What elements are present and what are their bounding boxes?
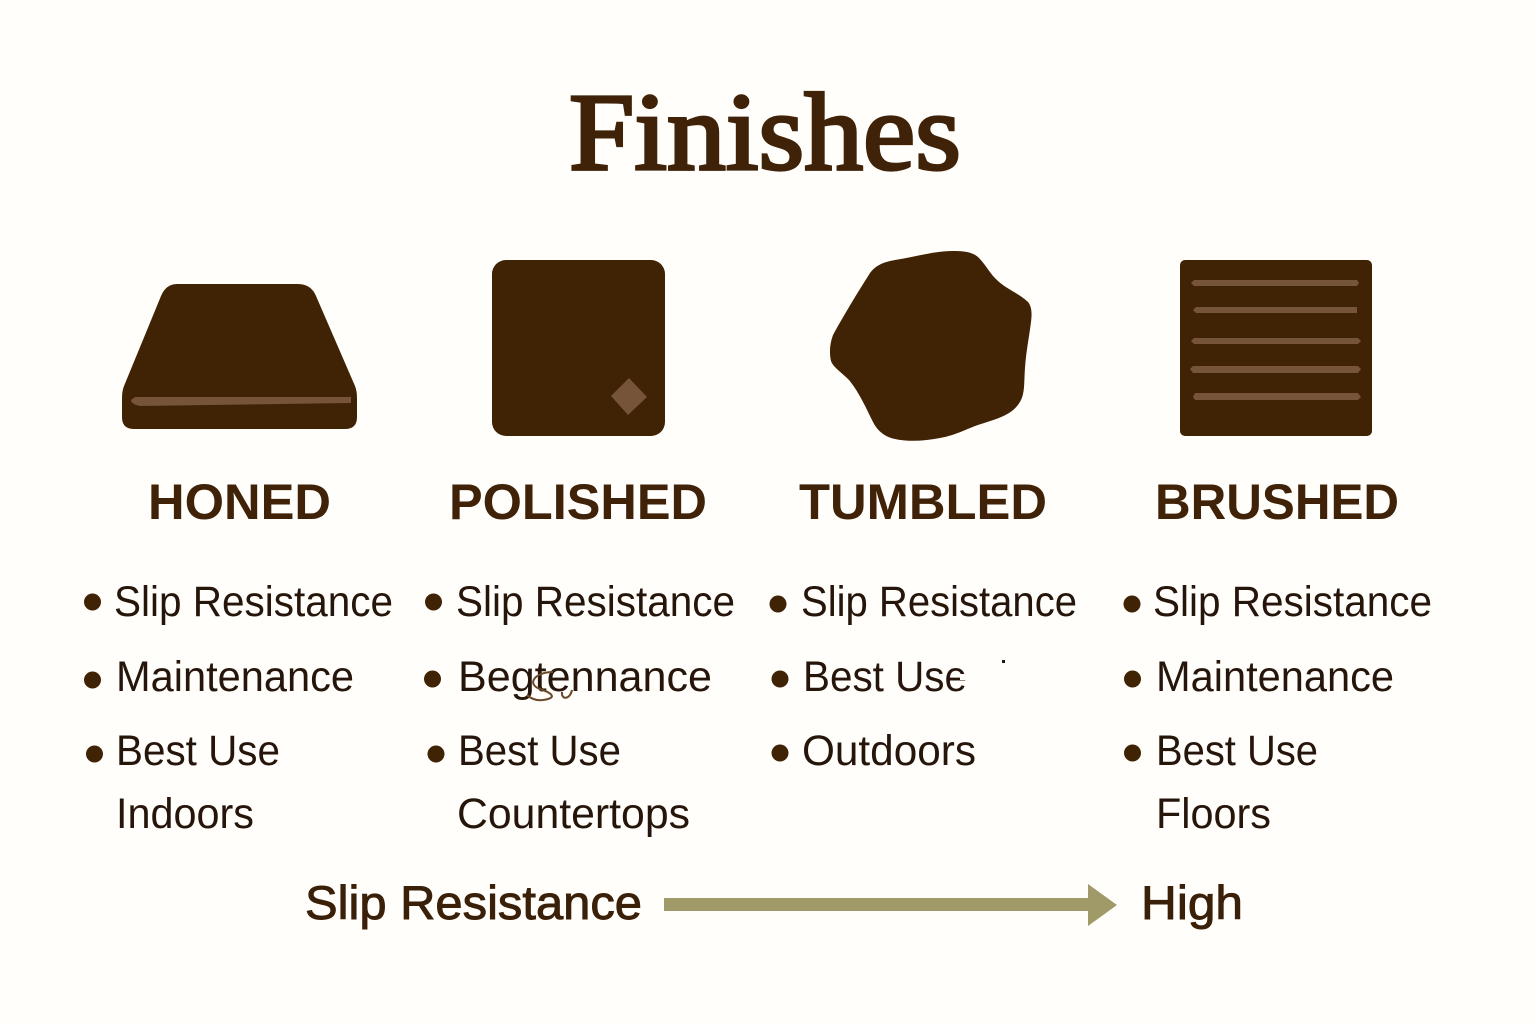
title: Finishes — [569, 71, 961, 193]
slip resistance scale — [305, 876, 1243, 929]
icon: honed stone slab — [122, 284, 357, 429]
panel: honed — [84, 284, 393, 838]
list: honed properties: Maintenance — [116, 653, 354, 701]
list: tumbled properties: Outdoors — [802, 727, 976, 775]
list: polished properties: Countertops — [457, 790, 690, 838]
heading: tumbled: TUMBLED — [799, 474, 1047, 530]
heading: brushed: BRUSHED — [1155, 474, 1399, 530]
icon: tumbled stone — [830, 251, 1032, 441]
icon: polished stone tile — [492, 260, 665, 436]
list: brushed properties: Floors — [1156, 790, 1271, 838]
arrow: increasing slip resistance — [664, 884, 1117, 926]
scale label: slip resistance: Slip Resistance — [305, 876, 642, 929]
list: honed properties: Indoors — [116, 790, 254, 838]
heading: honed: HONED — [148, 474, 331, 530]
list: tumbled properties — [770, 578, 1077, 775]
list: honed properties: Best Use — [116, 727, 280, 775]
panel: polished — [424, 260, 735, 838]
list: honed properties: Slip Resistance — [114, 578, 393, 626]
panel: brushed — [1124, 260, 1432, 838]
list: polished properties: Begtennance — [458, 653, 712, 701]
scale label: high: High — [1141, 876, 1243, 929]
list: polished properties: Best Use — [458, 727, 621, 775]
list: brushed properties: Maintenance — [1156, 653, 1394, 701]
panel: tumbled — [770, 251, 1077, 775]
list: brushed properties: Best Use — [1156, 727, 1318, 775]
list: brushed properties: Slip Resistance — [1153, 578, 1432, 626]
list: tumbled properties: Slip Resistance — [801, 578, 1077, 626]
list: brushed properties — [1124, 578, 1432, 838]
list: tumbled properties: Best Use — [803, 653, 967, 701]
list: polished properties: Slip Resistance — [456, 578, 735, 626]
list: honed properties — [84, 578, 393, 838]
heading: polished: POLISHED — [449, 474, 707, 530]
list: polished properties — [424, 578, 735, 838]
icon: brushed stone tile — [1180, 260, 1372, 436]
